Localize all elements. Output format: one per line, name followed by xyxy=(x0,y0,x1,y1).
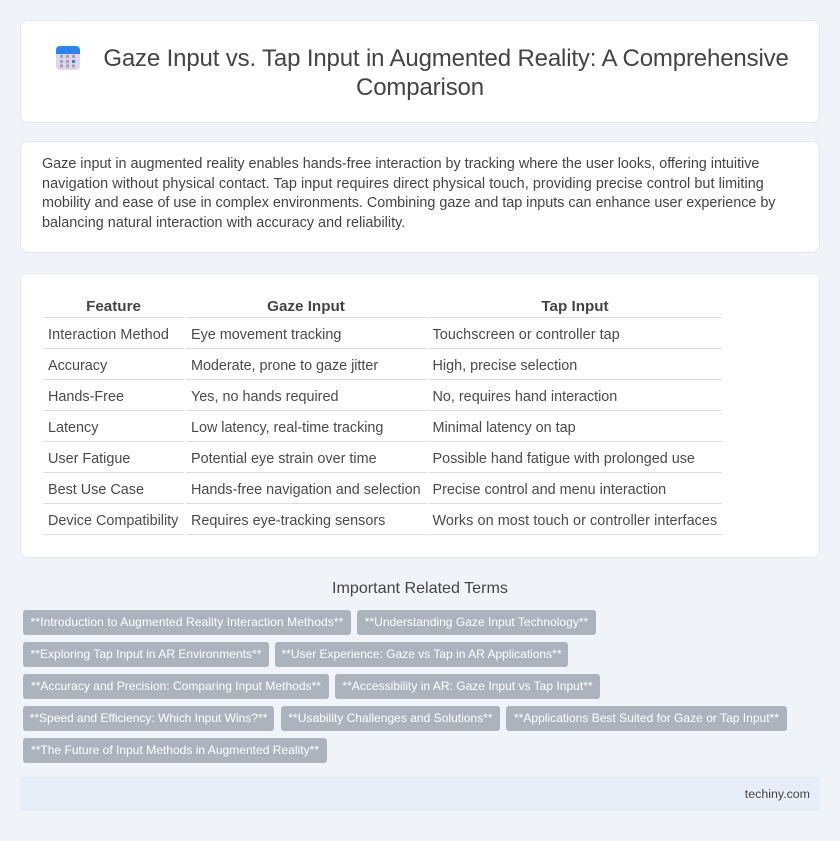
comparison table: Minimal latency on tap xyxy=(432,420,576,436)
comparison table: Device Compatibility xyxy=(48,513,178,529)
panel: title card xyxy=(20,20,820,123)
comparison table: Low latency, real-time tracking xyxy=(191,420,383,436)
related term tags: **Exploring Tap Input in AR Environments** xyxy=(31,647,261,661)
related term tags: **Usability Challenges and Solutions** xyxy=(288,711,493,725)
related term tags: **Introduction to Augmented Reality Interaction Methods** xyxy=(31,615,343,629)
comparison table: Requires eye-tracking sensors xyxy=(191,513,385,529)
comparison table: Eye movement tracking xyxy=(191,327,341,343)
comparison table: Hands-free navigation and selection xyxy=(191,482,421,498)
comparison table: Interaction Method xyxy=(48,327,169,343)
table header xyxy=(86,298,609,315)
related term tags: **Speed and Efficiency: Which Input Wins?** xyxy=(30,711,267,725)
comparison table: High, precise selection xyxy=(432,358,577,374)
comparison table: Possible hand fatigue with prolonged use xyxy=(432,451,695,467)
table header: Feature xyxy=(86,298,141,315)
comparison table: No, requires hand interaction xyxy=(432,389,617,405)
text block: summary: navigation without physical contact. Tap input requires direct physical touch, providing precise control but limiting xyxy=(42,176,764,192)
comparison table xyxy=(43,298,722,535)
text block: summary: mobility and ease of use in complex environments. Combining gaze and tap inputs can enhance user experience by xyxy=(42,195,775,211)
title xyxy=(103,45,789,101)
related term tags: **Accessibility in AR: Gaze Input vs Tap Input** xyxy=(342,679,593,693)
comparison table: Works on most touch or controller interfaces xyxy=(432,513,717,529)
comparison table: Best Use Case xyxy=(48,482,144,498)
comparison table: Potential eye strain over time xyxy=(191,451,377,467)
table header: Gaze Input xyxy=(267,298,345,315)
related term tags: **Applications Best Suited for Gaze or Tap Input** xyxy=(514,711,779,725)
text block: summary: balancing natural interaction with accuracy and reliability. xyxy=(42,214,405,230)
related term tags: **User Experience: Gaze vs Tap in AR Applications** xyxy=(282,647,562,661)
comparison table: Yes, no hands required xyxy=(191,389,338,405)
comparison table: Moderate, prone to gaze jitter xyxy=(191,358,378,374)
related term tags: **Understanding Gaze Input Technology** xyxy=(365,615,588,629)
comparison table: Hands-Free xyxy=(48,389,124,405)
text block: summary: Gaze input in augmented reality enables hands-free interaction by tracking where the user looks, offering intuitive xyxy=(42,156,759,172)
panel: summary card xyxy=(20,141,820,253)
footer source: techiny.com xyxy=(745,787,810,801)
text block: summary xyxy=(42,156,776,230)
related term tags: **Accuracy and Precision: Comparing Input Methods** xyxy=(31,679,321,693)
comparison table: User Fatigue xyxy=(48,451,130,467)
icon: calendar xyxy=(56,46,80,70)
comparison table: Latency xyxy=(48,420,98,436)
title: Gaze Input vs. Tap Input in Augmented Reality: A Comprehensive xyxy=(103,45,789,72)
footer bar xyxy=(20,777,820,811)
related term tags: **The Future of Input Methods in Augmented Reality** xyxy=(31,743,319,757)
related term tags xyxy=(23,610,787,763)
comparison table: Accuracy xyxy=(48,358,107,374)
comparison table: Precise control and menu interaction xyxy=(432,482,666,498)
title: Comparison xyxy=(356,74,484,101)
panel: comparison table card xyxy=(20,273,820,558)
heading: related terms: Important Related Terms xyxy=(332,579,508,597)
table header: Tap Input xyxy=(541,298,609,315)
comparison table: Touchscreen or controller tap xyxy=(432,327,620,343)
